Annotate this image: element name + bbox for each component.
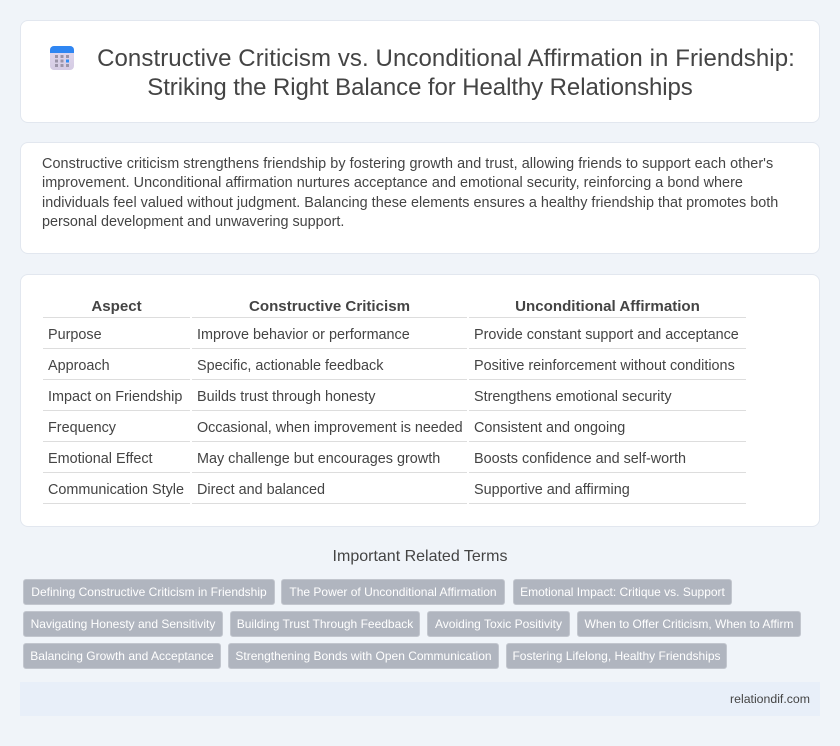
footer bar [20, 682, 820, 716]
comparison table: Communication Style [48, 482, 184, 498]
related term tags: Building Trust Through Feedback [237, 617, 413, 631]
related term tags: Avoiding Toxic Positivity [435, 617, 562, 631]
comparison table: Constructive Criticism [249, 298, 410, 315]
summary text: Constructive criticism strengthens friendship by fostering growth and trust, allowing friends to support each other's [42, 156, 773, 172]
comparison table: Impact on Friendship [48, 389, 182, 405]
text: Striking the Right Balance for Healthy Relationships [147, 74, 693, 101]
related term tags [23, 579, 801, 669]
comparison table: Boosts confidence and self-worth [474, 451, 686, 467]
comparison table: Positive reinforcement without conditions [474, 358, 735, 374]
comparison table: Builds trust through honesty [197, 389, 375, 405]
related term tags: When to Offer Criticism, When to Affirm [585, 617, 793, 631]
summary text: improvement. Unconditional affirmation nurtures acceptance and emotional security, reinforcing a bond where [42, 175, 743, 191]
related term tags: The Power of Unconditional Affirmation [289, 585, 497, 599]
comparison table: Aspect [91, 298, 142, 315]
title [97, 45, 795, 101]
comparison table: Direct and balanced [197, 482, 325, 498]
related term tags: Fostering Lifelong, Healthy Friendships [512, 649, 721, 663]
heading: related terms: Important Related Terms [333, 548, 507, 565]
comparison table: Approach [48, 358, 110, 374]
summary text: individuals feel valued without judgment. Balancing these elements ensures a healthy friendship that promotes both [42, 194, 778, 210]
comparison table: Purpose [48, 327, 102, 343]
related term tags: Navigating Honesty and Sensitivity [31, 617, 215, 631]
related term tags: Emotional Impact: Critique vs. Support [520, 585, 725, 599]
icon: calendar [50, 46, 74, 70]
comparison table: Emotional Effect [48, 451, 153, 467]
footer source: relationdif.com [730, 692, 810, 706]
related term tags: Defining Constructive Criticism in Friendship [31, 585, 267, 599]
comparison table: Provide constant support and acceptance [474, 327, 739, 343]
comparison table: May challenge but encourages growth [197, 451, 440, 467]
summary text [42, 156, 778, 230]
comparison table: Consistent and ongoing [474, 420, 625, 436]
comparison table: Strengthens emotional security [474, 389, 672, 405]
text: Constructive Criticism vs. Unconditional Affirmation in Friendship: [97, 45, 795, 72]
comparison table [43, 298, 746, 504]
comparison table: Supportive and affirming [474, 482, 630, 498]
panel: summary card [20, 142, 820, 254]
related term tags: Strengthening Bonds with Open Communication [235, 649, 492, 663]
related term tags: Balancing Growth and Acceptance [30, 649, 214, 663]
comparison table: Frequency [48, 420, 116, 436]
comparison table: Unconditional Affirmation [515, 298, 700, 315]
comparison table: Occasional, when improvement is needed [197, 420, 463, 436]
comparison table: Specific, actionable feedback [197, 358, 383, 374]
panel: title card [20, 20, 820, 123]
panel: comparison table card [20, 274, 820, 527]
summary text: personal development and unwavering support. [42, 214, 344, 230]
comparison table: Improve behavior or performance [197, 327, 410, 343]
